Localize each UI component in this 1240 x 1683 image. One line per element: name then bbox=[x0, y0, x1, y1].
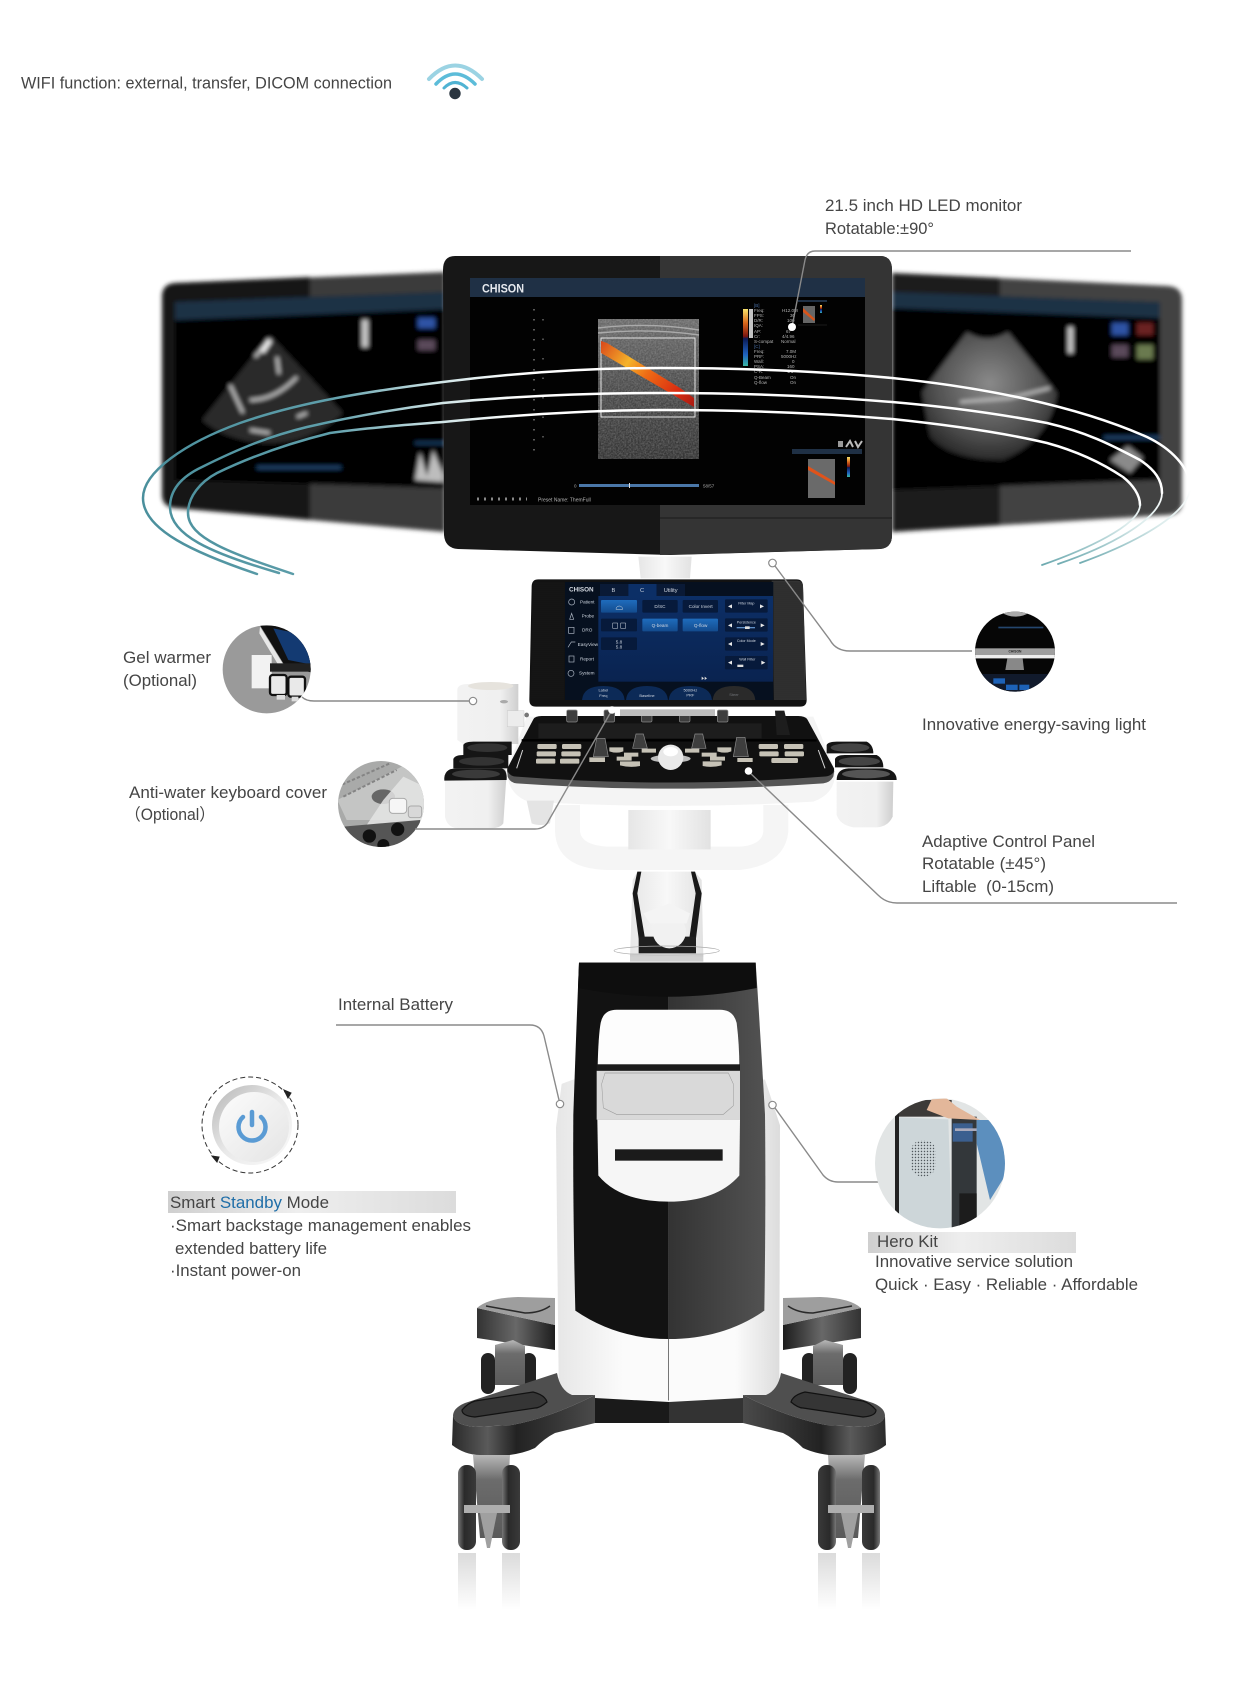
icon: power button bbox=[202, 1077, 298, 1173]
gel warmer thumbnail bbox=[222, 625, 311, 714]
parameter list: On bbox=[790, 380, 797, 385]
parameter list: AP: bbox=[754, 329, 761, 334]
color scale bbox=[743, 309, 753, 366]
touchscreen tabs bbox=[600, 584, 685, 596]
touchscreen sidebar: Report bbox=[580, 656, 595, 661]
right rotated monitor bbox=[892, 273, 1182, 532]
depth slider bbox=[574, 483, 715, 488]
touchscreen steppers: Persistence bbox=[737, 620, 756, 624]
hero kit text: Quick · Easy · Reliable · Affordable bbox=[875, 1276, 1138, 1294]
gel warmer caption: Gel warmer bbox=[123, 649, 212, 667]
touchscreen keys: D/SC bbox=[654, 604, 666, 609]
keyboard cover caption: Anti-water keyboard cover bbox=[129, 784, 328, 802]
parameter list: [B] bbox=[754, 303, 760, 308]
leader line: monitor bbox=[788, 251, 1131, 331]
control panel caption: Adaptive Control Panel bbox=[922, 833, 1095, 851]
parameter list: PRF: bbox=[754, 354, 764, 359]
preset label: Preset Name: ThemFull bbox=[538, 498, 591, 504]
lift arm bbox=[614, 872, 719, 962]
touchscreen panel bbox=[529, 579, 807, 707]
touchscreen sidebar: DRO bbox=[582, 628, 593, 633]
touchscreen sidebar: CHISON bbox=[569, 587, 594, 594]
rotation arcs bbox=[143, 368, 1190, 574]
touchscreen sidebar: Patient bbox=[580, 600, 595, 605]
center base bbox=[595, 1398, 743, 1423]
top thumbnail bbox=[798, 300, 827, 325]
control panel caption: Rotatable (±45°) bbox=[922, 855, 1046, 873]
parameter list: C-R: bbox=[754, 369, 763, 374]
keyboard cover caption bbox=[125, 784, 328, 824]
smart standby text: ·Instant power-on bbox=[170, 1262, 301, 1280]
internal battery caption: Internal Battery bbox=[338, 996, 454, 1014]
touchscreen soft knobs: Baseline bbox=[639, 693, 655, 698]
smart standby heading bbox=[168, 1191, 456, 1213]
icon: wifi bbox=[429, 66, 482, 99]
parameter list: 4/4.96 bbox=[782, 334, 795, 339]
smart standby text: ·Smart backstage management enables bbox=[170, 1217, 471, 1235]
main monitor bbox=[443, 256, 892, 555]
monitor caption: Rotatable:±90° bbox=[825, 220, 934, 238]
parameter list: Normal bbox=[781, 339, 796, 344]
touchscreen tabs: Utility bbox=[664, 588, 678, 594]
touchscreen soft knobs: PRF bbox=[686, 692, 695, 697]
touchscreen blue area bbox=[598, 596, 773, 682]
cart body bbox=[556, 963, 780, 1402]
touchscreen sidebar: System bbox=[579, 671, 595, 676]
monitor caption: 21.5 inch HD LED monitor bbox=[825, 197, 1023, 215]
slider handle bbox=[775, 711, 790, 735]
touchscreen keys: 5.8 bbox=[616, 639, 623, 644]
parameter list bbox=[754, 303, 798, 385]
energy-saving caption: Innovative energy-saving light bbox=[922, 716, 1146, 734]
parameter list: Wall: bbox=[754, 359, 764, 364]
depth slider: 0 bbox=[574, 484, 577, 488]
touchscreen keys: 5.8 bbox=[616, 645, 623, 650]
smart standby heading: Smart Standby Mode bbox=[170, 1194, 329, 1212]
touchscreen steppers: Filter Map bbox=[738, 601, 754, 605]
parameter list: On bbox=[790, 375, 797, 380]
hero kit thumbnail bbox=[875, 1098, 1007, 1228]
touchscreen soft knobs: Freq bbox=[599, 693, 607, 698]
hero kit text bbox=[875, 1253, 1138, 1294]
gel warmer bbox=[457, 682, 529, 744]
energy-saving light thumbnail: CHISON bbox=[1009, 650, 1022, 654]
touchscreen keys: Color Invert bbox=[689, 604, 713, 609]
parameter list: 0 bbox=[792, 359, 795, 364]
parameter list: FPS: bbox=[754, 313, 764, 318]
parameter list: [C] bbox=[754, 344, 760, 349]
parameter list: 30 bbox=[790, 313, 796, 318]
control panel body bbox=[507, 709, 835, 806]
trackball bbox=[651, 745, 691, 770]
parameter list: IQA: bbox=[754, 323, 763, 328]
column bbox=[628, 810, 711, 849]
knobs bbox=[567, 710, 748, 757]
parameter list: Q-flow bbox=[754, 380, 768, 385]
parameter list: D/R: bbox=[754, 318, 763, 323]
monitor stem bbox=[638, 557, 692, 578]
WIFI caption: WIFI function: external, transfer, DICOM connection bbox=[21, 74, 392, 92]
energy-saving light thumbnail bbox=[973, 610, 1057, 693]
parameter list: 160 bbox=[787, 364, 795, 369]
probe holders left bbox=[444, 742, 512, 828]
parameter list: Freq: bbox=[754, 308, 765, 313]
parameter list: Freq: bbox=[754, 349, 765, 354]
touchscreen keys: Q-beam bbox=[652, 623, 669, 628]
parameter list: PSA: bbox=[754, 364, 764, 369]
touchscreen keys: Q-flow bbox=[694, 623, 708, 628]
touchscreen steppers: Wall Filter bbox=[739, 658, 756, 662]
leader line: hero kit bbox=[769, 1101, 878, 1182]
black front shell bbox=[573, 963, 765, 1339]
parameter list: 3 bbox=[790, 323, 793, 328]
touchscreen soft knobs: 5000Hz bbox=[683, 687, 697, 692]
depth slider: 58/57 bbox=[703, 484, 715, 488]
touchscreen steppers bbox=[725, 599, 768, 669]
smart standby text: extended battery life bbox=[175, 1240, 327, 1258]
parameter list: 67 bbox=[786, 329, 792, 334]
gel warmer caption bbox=[123, 649, 212, 690]
touchscreen soft knobs bbox=[582, 677, 755, 700]
front window bbox=[597, 1010, 740, 1202]
ultrasound image bbox=[598, 319, 699, 459]
control panel caption: Liftable (0-15cm) bbox=[922, 878, 1054, 896]
gel warmer caption: (Optional) bbox=[123, 672, 197, 690]
touchscreen keys bbox=[601, 600, 718, 650]
parameter list: Cr: bbox=[754, 334, 760, 339]
leader line: keyboard cover bbox=[415, 706, 616, 829]
probe holders right bbox=[827, 742, 897, 827]
front foot and wheel right bbox=[743, 1373, 886, 1610]
leader line: control panel bbox=[745, 767, 1177, 903]
parameter list: H12.0M bbox=[782, 308, 798, 313]
parameter list: 7.0M bbox=[786, 349, 796, 354]
touchscreen steppers: Color Mode bbox=[737, 639, 756, 643]
handle bbox=[527, 801, 788, 870]
monitor header bar bbox=[470, 278, 865, 297]
leader line: battery bbox=[336, 1025, 564, 1108]
console: touchscreen and control panel bbox=[444, 557, 897, 962]
touchscreen tabs: C bbox=[640, 588, 644, 594]
leader line: gel warmer bbox=[302, 697, 477, 705]
rear foot and wheel left bbox=[477, 1297, 555, 1394]
parameter list: S-compat bbox=[754, 339, 774, 344]
rear foot and wheel right bbox=[783, 1297, 861, 1394]
touchscreen sidebar bbox=[568, 587, 599, 676]
touchscreen soft knobs: Label bbox=[598, 687, 608, 692]
left rotated monitor bbox=[162, 272, 445, 532]
hero kit heading: Hero Kit bbox=[877, 1233, 938, 1251]
hero kit heading bbox=[868, 1232, 1076, 1253]
white side shells bbox=[556, 1080, 780, 1402]
keys bbox=[536, 744, 804, 767]
parameter list: 1/1 bbox=[787, 369, 794, 374]
touchscreen tabs: B bbox=[611, 588, 615, 594]
front foot and wheel left bbox=[452, 1373, 595, 1610]
cine review panel bbox=[792, 441, 862, 498]
control panel caption bbox=[922, 833, 1095, 896]
touchscreen sidebar: EasyView bbox=[578, 642, 599, 647]
touchscreen soft knobs: Steer bbox=[729, 692, 739, 697]
hero kit text: Innovative service solution bbox=[875, 1253, 1073, 1271]
leader line: energy-saving light bbox=[769, 559, 972, 651]
parameter list: 100 bbox=[787, 318, 795, 323]
parameter list: Q-Beam bbox=[754, 375, 771, 380]
keyboard cover caption: （Optional） bbox=[125, 805, 215, 824]
touchscreen sidebar: Probe bbox=[582, 614, 595, 619]
CHISON logo: CHISON bbox=[482, 282, 524, 296]
smart standby text bbox=[170, 1217, 471, 1280]
monitor caption bbox=[825, 197, 1023, 238]
keyboard cover thumbnail bbox=[337, 760, 425, 851]
parameter list: 5000Hz bbox=[781, 354, 797, 359]
